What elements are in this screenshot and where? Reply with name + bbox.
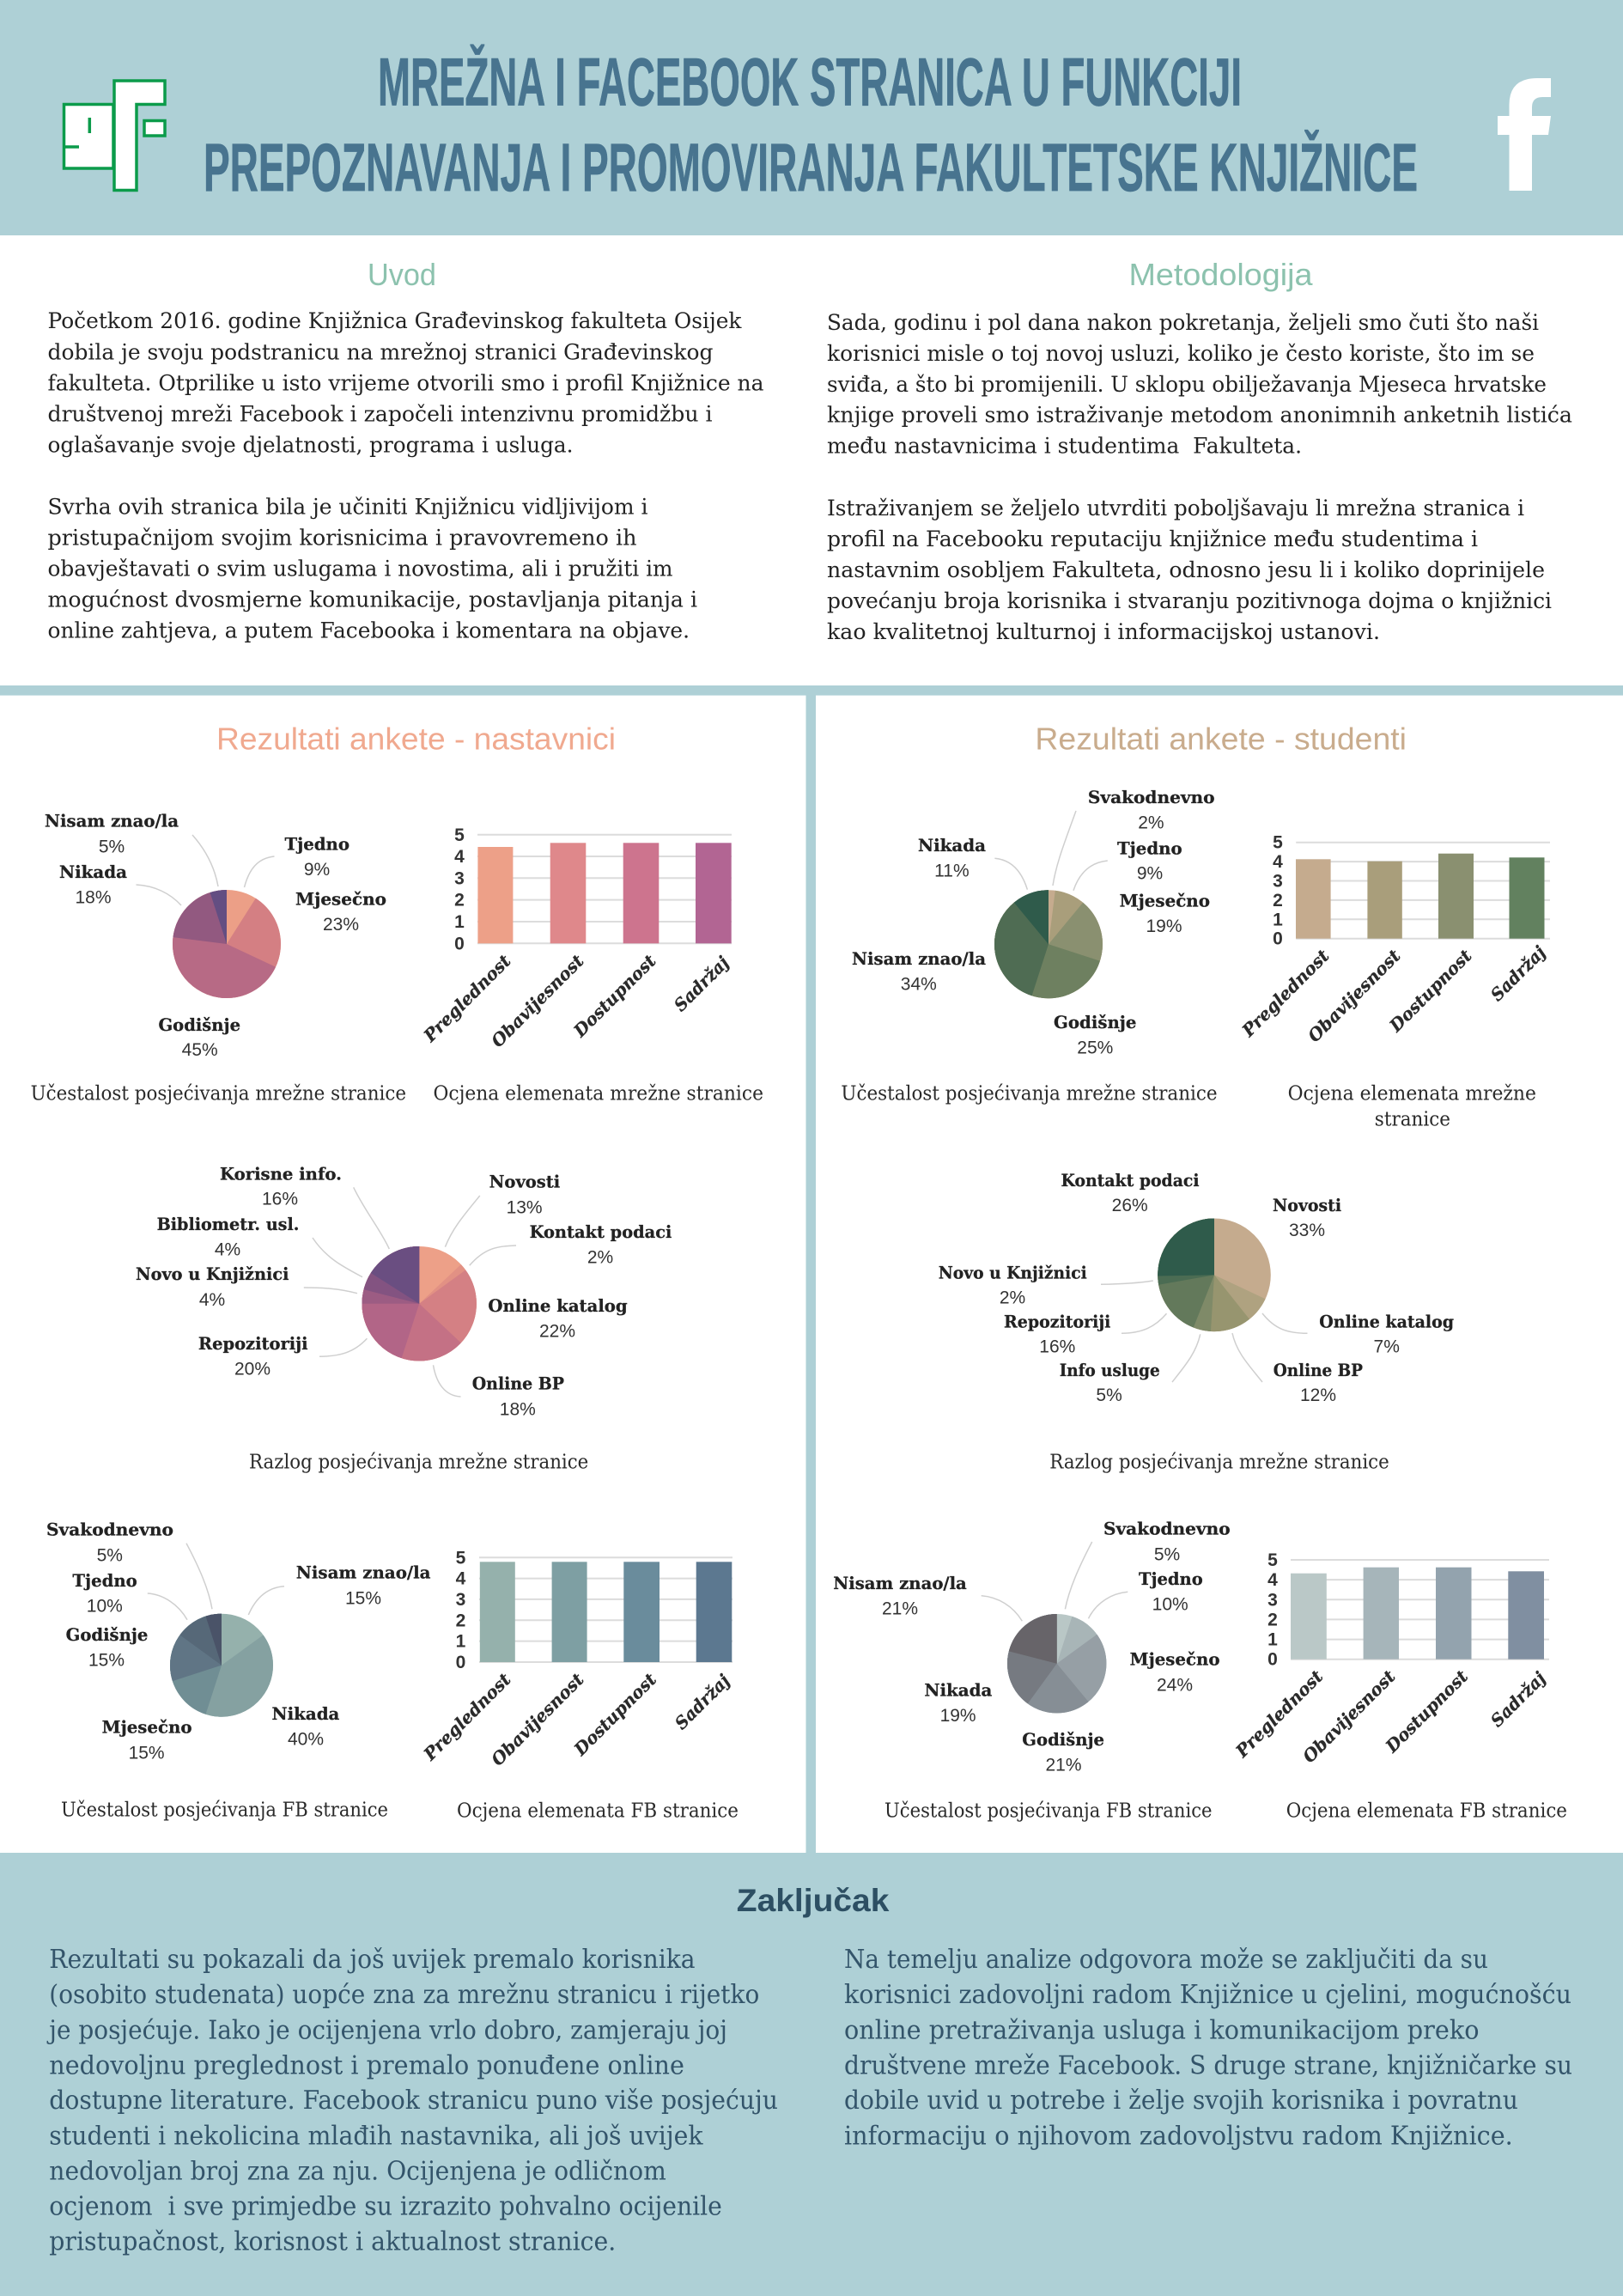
pie chart: reason for visiting website, students: Online katalog: [1319, 1312, 1454, 1331]
bar chart: website element ratings, teachers: 1: [454, 912, 465, 932]
text block: conclusion right: dobile uvid u potrebe i želje svojih korisnika i povratnu: [844, 2086, 1518, 2116]
pie chart: website visit frequency, teachers: Godišnje: [158, 1015, 240, 1035]
pie chart: Facebook visit frequency, teachers: 15%: [88, 1650, 125, 1670]
pie chart: reason for visiting website, students: Repozitoriji: [1004, 1312, 1110, 1331]
pie chart: website visit frequency, students: Mjesečno: [1120, 891, 1210, 910]
bar chart: website element ratings, teachers: Dostupnost: [568, 950, 660, 1042]
heading: Zaključak: Zaključak: [737, 1883, 890, 1918]
text block: Metodologija: Istraživanjem se željelo utvrditi poboljšavaju li mrežna stranica i: [827, 496, 1524, 521]
pie chart: reason for visiting website, teachers: 2%: [587, 1248, 613, 1268]
pie chart: website visit frequency, students: 25%: [1077, 1038, 1113, 1058]
bar chart: website element ratings, teachers: 5: [454, 825, 465, 845]
heading: Rezultati ankete - studenti: Rezultati ankete - studenti: [1035, 721, 1407, 756]
pie chart: reason for visiting website, teachers: Online katalog: [488, 1296, 628, 1316]
pie chart: reason for visiting website, students: Info usluge: [1060, 1361, 1160, 1380]
pie chart: website visit frequency, students: Svakodnevno: [1088, 788, 1215, 807]
text block: conclusion left: nedovoljnu preglednost i premalo ponuđene online: [49, 2050, 684, 2080]
pie chart: reason for visiting website, teachers: [136, 1164, 672, 1419]
pie chart: website visit frequency, teachers: Nikada: [59, 862, 127, 882]
bar chart: Facebook element ratings, students: [1231, 1550, 1550, 1767]
pie chart: reason for visiting website, students: Kontakt podaci: [1061, 1171, 1199, 1191]
pie chart: Facebook visit frequency, teachers: 40%: [288, 1730, 324, 1750]
text block: Metodologija: nastavnim osobljem Fakulteta, odnosno jesu li i koliko doprinijele: [827, 557, 1545, 582]
heading: Metodologija: Metodologija: [1128, 257, 1314, 292]
pie chart: website visit frequency, students: 34%: [901, 975, 937, 995]
text block: Metodologija: [827, 310, 1572, 644]
bar chart: Facebook element ratings, teachers: Obavijesnost: [487, 1669, 588, 1769]
pie chart: reason for visiting website, students: 12%: [1300, 1386, 1336, 1405]
bar chart: Facebook element ratings, students: 0: [1267, 1650, 1278, 1670]
pie chart: reason for visiting website, students: 26%: [1112, 1196, 1148, 1215]
text block: conclusion left: nedovoljan broj zna za nju. Ocijenjena je odličnom: [49, 2156, 666, 2186]
pie chart: reason for visiting website, students: Online BP: [1273, 1361, 1363, 1380]
caption: reason for visiting website: Razlog posjećivanja mrežne stranice: [1049, 1452, 1389, 1474]
pie chart: website visit frequency, teachers: 45%: [182, 1040, 218, 1060]
bar chart: website element ratings, students: Sadržaj: [1486, 941, 1550, 1005]
bar chart: Facebook element ratings, teachers: 3: [456, 1590, 465, 1610]
text block: conclusion left: ocjenom i sve primjedbe su izrazito pohvalno ocijenile: [49, 2192, 722, 2221]
pie chart: Facebook visit frequency, students: 21%: [882, 1599, 918, 1618]
pie chart: website visit frequency, teachers: Tjedno: [285, 834, 350, 854]
text block: Metodologija: Sada, godinu i pol dana nakon pokretanja, željeli smo čuti što naši: [827, 310, 1539, 335]
text block: Uvod: pristupačnijom svojim korisnicima i pravovremeno ih: [48, 526, 637, 551]
bar chart: website element ratings, students: Obavijesnost: [1304, 945, 1405, 1046]
pie chart: reason for visiting website, teachers: 4%: [215, 1240, 240, 1260]
text block: Metodologija: korisnici misle o toj novoj usluzi, koliko je često koriste, što im se: [827, 341, 1535, 366]
bar chart: website element ratings, teachers: Sadržaj: [670, 952, 733, 1015]
bar chart: website element ratings, teachers: 3: [454, 868, 465, 888]
bar chart: Facebook element ratings, students: 3: [1267, 1590, 1278, 1610]
pie chart: reason for visiting website, teachers: 18%: [500, 1399, 536, 1419]
pie chart: Facebook visit frequency, teachers: [46, 1520, 431, 1763]
bar chart: website element ratings, teachers: 2: [454, 891, 465, 910]
pie chart: reason for visiting website, students: 33%: [1289, 1221, 1325, 1240]
bar chart: website element ratings, students: 3: [1273, 871, 1283, 892]
caption: website element ratings: Ocjena elemenata mrežne: [1288, 1083, 1536, 1105]
pie chart: website visit frequency, students: 2%: [1138, 813, 1164, 832]
pie chart: website visit frequency, teachers: 5%: [99, 837, 125, 857]
caption: Facebook visit frequency: Učestalost posjećivanja FB stranice: [61, 1800, 388, 1822]
bar chart: website element ratings, teachers: [419, 825, 733, 1051]
text block: Uvod: Svrha ovih stranica bila je učiniti Knjižnicu vidljivijom i: [48, 494, 647, 519]
bar chart: website element ratings, students: 2: [1273, 891, 1283, 910]
bar chart: website element ratings, students: 4: [1273, 852, 1283, 872]
pie chart: reason for visiting website, students: Novosti: [1273, 1196, 1341, 1215]
pie chart: reason for visiting website, teachers: Novo u Knjižnici: [136, 1264, 289, 1284]
bar chart: website element ratings, teachers: 0: [454, 934, 465, 953]
pie chart: website visit frequency, students: Nikada: [918, 836, 986, 856]
pie chart: Facebook visit frequency, students: 24%: [1157, 1676, 1193, 1696]
text block: Metodologija: knjige proveli smo istraživanje metodom anonimnih anketnih listića: [827, 402, 1572, 427]
bar chart: Facebook element ratings, students: Preglednost: [1231, 1666, 1328, 1762]
bar chart: website element ratings, students: 0: [1273, 929, 1283, 949]
text block: Uvod: fakulteta. Otprilike u isto vrijeme otvorili smo i profil Knjižnice na: [48, 370, 764, 395]
text block: Metodologija: povećanju broja korisnika i stvaranju pozitivnoga dojma o knjižnici: [827, 588, 1552, 613]
caption: website element ratings: Ocjena elemenata mrežne stranice: [433, 1083, 763, 1105]
heading: Uvod: Uvod: [368, 257, 436, 292]
bar chart: Facebook element ratings, students: Obavijesnost: [1298, 1666, 1400, 1767]
panel: survey results students: [816, 696, 1623, 1853]
pie chart: reason for visiting website, students: 5%: [1096, 1386, 1122, 1405]
panel: survey results teachers: [0, 696, 805, 1853]
bar chart: Facebook element ratings, students: Sadržaj: [1486, 1667, 1550, 1731]
pie chart: Facebook visit frequency, teachers: Svakodnevno: [46, 1520, 173, 1540]
pie chart: website visit frequency, teachers: 9%: [304, 860, 330, 880]
pie chart: Facebook visit frequency, students: Mjesečno: [1130, 1650, 1220, 1670]
pie chart: Facebook visit frequency, teachers: Godišnje: [66, 1625, 148, 1645]
bar chart: Facebook element ratings, teachers: [419, 1548, 734, 1769]
bar chart: website element ratings, students: [1237, 833, 1550, 1046]
text block: conclusion right: društvene mreže Facebook. S druge strane, knjižničarke su: [844, 2050, 1572, 2080]
bar chart: Facebook element ratings, students: 2: [1267, 1610, 1278, 1629]
pie chart: website visit frequency, teachers: 18%: [75, 888, 112, 908]
caption: website visit frequency: Učestalost posjećivanja mrežne stranice: [841, 1083, 1218, 1105]
pie chart: reason for visiting website, teachers: 16%: [262, 1190, 298, 1209]
pie chart: website visit frequency, teachers: [45, 812, 386, 1060]
text block: conclusion left: je posjećuje. Iako je ocijenjena vrlo dobro, zamjeraju joj: [47, 2015, 727, 2046]
pie chart: website visit frequency, students: Tjedno: [1117, 838, 1182, 858]
bar chart: Facebook element ratings, teachers: 4: [456, 1569, 466, 1589]
text block: conclusion right: online pretraživanja usluga i komunikacijom preko: [844, 2015, 1480, 2046]
pie chart: website visit frequency, students: 11%: [934, 862, 970, 881]
text block: conclusion right: korisnici zadovoljni radom Knjižnice u cjelini, mogućnošću: [844, 1980, 1571, 2010]
header banner: [0, 0, 1623, 235]
pie chart: reason for visiting website, students: 7%: [1374, 1337, 1400, 1356]
pie chart: reason for visiting website, teachers: 22%: [539, 1322, 575, 1342]
bar chart: website element ratings, teachers: Obavijesnost: [487, 950, 588, 1051]
bar chart: website element ratings, students: Dostupnost: [1384, 945, 1476, 1037]
title: [204, 44, 1418, 205]
pie chart: Facebook visit frequency, teachers: 15%: [345, 1588, 381, 1608]
icon: facebook f: [1498, 78, 1551, 191]
text block: conclusion right: [844, 1945, 1572, 2152]
pie chart: Facebook visit frequency, students: Nikada: [924, 1680, 993, 1700]
text block: Uvod: Početkom 2016. godine Knjižnica Građevinskog fakulteta Osijek: [48, 308, 742, 333]
bar chart: Facebook element ratings, teachers: Preglednost: [419, 1669, 515, 1765]
pie chart: reason for visiting website, teachers: Korisne info.: [220, 1164, 342, 1184]
bar chart: Facebook element ratings, teachers: 0: [456, 1653, 465, 1672]
text block: conclusion left: pristupačnost, korisnost i aktualnost stranice.: [49, 2226, 616, 2256]
text block: Uvod: [48, 308, 764, 643]
pie chart: Facebook visit frequency, teachers: 5%: [97, 1545, 123, 1565]
bar chart: Facebook element ratings, students: 4: [1267, 1570, 1278, 1590]
pie chart: Facebook visit frequency, students: Svakodnevno: [1103, 1520, 1231, 1539]
pie chart: website visit frequency, students: 19%: [1146, 917, 1182, 936]
text block: Metodologija: među nastavnicima i studentima Fakulteta.: [827, 433, 1302, 458]
pie chart: reason for visiting website, teachers: 4%: [199, 1290, 225, 1310]
bar chart: Facebook element ratings, teachers: Dostupnost: [569, 1669, 661, 1760]
bar chart: website element ratings, teachers: Preglednost: [419, 950, 515, 1046]
caption: Facebook element ratings: Ocjena elemenata FB stranice: [457, 1800, 739, 1823]
text block: Metodologija: sviđa, a što bi promijenili. U sklopu obilježavanja Mjeseca hrvatske: [827, 372, 1547, 397]
pie chart: reason for visiting website, teachers: Online BP: [472, 1374, 564, 1394]
caption: website element ratings: stranice: [1375, 1109, 1450, 1131]
text block: Uvod: mogućnost dvosmjerne komunikacije, postavljanja pitanja i: [48, 588, 697, 612]
text block: Metodologija: kao kvalitetnoj kulturnoj i informacijskoj ustanovi.: [827, 619, 1380, 644]
bar chart: Facebook element ratings, teachers: Sadržaj: [671, 1670, 734, 1733]
pie chart: reason for visiting website, teachers: 20%: [234, 1360, 270, 1379]
pie chart: reason for visiting website, teachers: Kontakt podaci: [530, 1222, 672, 1242]
text block: conclusion right: Na temelju analize odgovora može se zaključiti da su: [844, 1945, 1488, 1975]
caption: reason for visiting website: Razlog posjećivanja mrežne stranice: [249, 1452, 588, 1474]
pie chart: Facebook visit frequency, students: 10%: [1152, 1594, 1188, 1614]
bar chart: Facebook element ratings, teachers: 1: [456, 1632, 466, 1652]
text block: Uvod: online zahtjeva, a putem Facebooka i komentara na objave.: [48, 618, 690, 643]
bar chart: website element ratings, students: 1: [1273, 910, 1283, 929]
text block: Uvod: dobila je svoju podstranicu na mrežnoj stranici Građevinskog: [48, 339, 713, 364]
text block: conclusion right: informaciju o njihovom zadovoljstvu radom Knjižnice.: [844, 2122, 1513, 2152]
bar chart: Facebook element ratings, students: 1: [1267, 1630, 1278, 1650]
pie chart: reason for visiting website, teachers: Repozitoriji: [198, 1334, 308, 1354]
pie chart: website visit frequency, students: 9%: [1137, 864, 1163, 884]
pie chart: Facebook visit frequency, students: 19%: [940, 1706, 976, 1726]
text block: conclusion left: studenti i nekolicina mlađih nastavnika, ali još uvijek: [49, 2122, 703, 2152]
pie chart: Facebook visit frequency, teachers: Mjesečno: [102, 1718, 192, 1738]
pie chart: Facebook visit frequency, students: [833, 1520, 1231, 1775]
heading: Rezultati ankete - nastavnici: Rezultati ankete - nastavnici: [216, 721, 616, 756]
text block: Uvod: obavještavati o svim uslugama i novostima, ali i pružiti im: [48, 556, 673, 581]
text block: Metodologija: profil na Facebooku reputaciju knjižnice među studentima i: [827, 527, 1478, 551]
bar chart: Facebook element ratings, students: Dostupnost: [1381, 1666, 1473, 1757]
pie chart: Facebook visit frequency, students: Tjedno: [1139, 1569, 1203, 1589]
bar chart: website element ratings, students: Preglednost: [1237, 945, 1334, 1041]
pie chart: Facebook visit frequency, teachers: Nikada: [271, 1704, 340, 1724]
text block: conclusion left: Rezultati su pokazali da još uvijek premalo korisnika: [49, 1945, 696, 1975]
pie chart: reason for visiting website, teachers: 13%: [507, 1198, 543, 1218]
panel: conclusion: [0, 1853, 1623, 2296]
pie chart: website visit frequency, students: [852, 788, 1215, 1058]
bar chart: Facebook element ratings, students: 5: [1267, 1550, 1278, 1570]
bar chart: website element ratings, students: 5: [1273, 833, 1283, 853]
pie chart: website visit frequency, teachers: Mjesečno: [295, 889, 386, 909]
pie chart: Facebook visit frequency, students: Godišnje: [1022, 1730, 1104, 1750]
pie chart: website visit frequency, teachers: Nisam znao/la: [45, 812, 179, 831]
pie chart: reason for visiting website, students: Novo u Knjižnici: [939, 1263, 1087, 1282]
pie chart: Facebook visit frequency, students: Nisam znao/la: [833, 1574, 967, 1593]
caption: Facebook visit frequency: Učestalost posjećivanja FB stranice: [884, 1800, 1213, 1823]
caption: website visit frequency: Učestalost posjećivanja mrežne stranice: [31, 1083, 406, 1105]
bar chart: Facebook element ratings, teachers: 2: [456, 1611, 465, 1630]
pie chart: Facebook visit frequency, teachers: 10%: [87, 1597, 123, 1617]
pie chart: reason for visiting website, students: 2%: [1000, 1288, 1025, 1307]
caption: Facebook element ratings: Ocjena elemenata FB stranice: [1286, 1800, 1567, 1823]
bar chart: website element ratings, teachers: 4: [454, 847, 465, 867]
text block: Uvod: društvenoj mreži Facebook i započeli intenzivnu promidžbu i: [48, 401, 713, 426]
icon: faculty logo: [64, 81, 165, 191]
pie chart: reason for visiting website, students: [939, 1171, 1454, 1405]
text block: Uvod: oglašavanje svoje djelatnosti, programa i usluga.: [48, 432, 574, 457]
text block: conclusion left: dostupne literature. Facebook stranicu puno više posjećuju: [49, 2086, 778, 2116]
text block: conclusion left: (osobito studenata) uopće zna za mrežnu stranicu i rijetko: [49, 1980, 759, 2010]
pie chart: Facebook visit frequency, teachers: Tjedno: [72, 1571, 137, 1591]
panel: intro and methodology: [0, 235, 1623, 685]
pie chart: Facebook visit frequency, teachers: Nisam znao/la: [296, 1563, 431, 1583]
pie chart: Facebook visit frequency, students: 5%: [1154, 1545, 1180, 1565]
text block: conclusion left: [47, 1945, 778, 2256]
pie chart: website visit frequency, students: Godišnje: [1054, 1013, 1137, 1032]
pie chart: reason for visiting website, teachers: Bibliometr. usl.: [157, 1215, 299, 1234]
pie chart: reason for visiting website, teachers: Novosti: [489, 1172, 560, 1192]
caption: website element ratings: [1288, 1083, 1536, 1131]
pie chart: website visit frequency, students: Nisam znao/la: [852, 949, 986, 969]
pie chart: website visit frequency, teachers: 23%: [323, 915, 359, 935]
pie chart: Facebook visit frequency, teachers: 15%: [129, 1743, 165, 1763]
bar chart: Facebook element ratings, teachers: 5: [456, 1548, 466, 1568]
pie chart: Facebook visit frequency, students: 21%: [1045, 1756, 1082, 1775]
pie chart: reason for visiting website, students: 16%: [1039, 1337, 1075, 1356]
